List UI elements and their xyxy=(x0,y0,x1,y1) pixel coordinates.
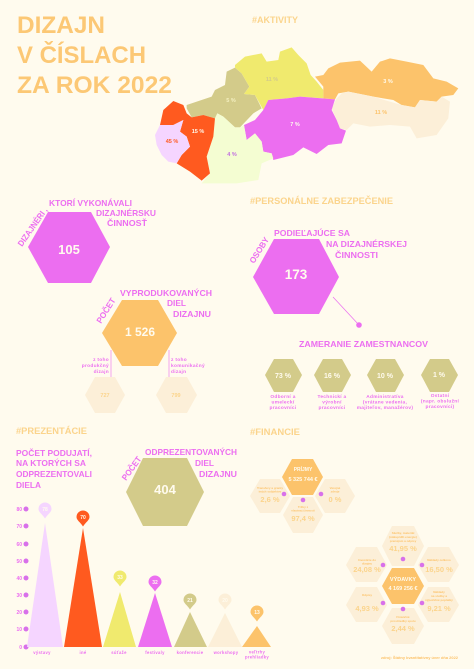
hexagon: 1 %: 1 % xyxy=(433,372,446,379)
hexagon: 24,08 % xyxy=(346,547,387,582)
hexagon: 4,93 %: Odpisy xyxy=(362,593,372,597)
label: osoby podieľajúce sa: ČINNOSTI xyxy=(335,249,378,260)
hexagon: 404: 404 xyxy=(154,482,177,497)
label: počet vyprodukovaných: DIZAJNU xyxy=(173,309,211,319)
hexagon: počet 1 526: 1 526 xyxy=(125,325,155,339)
label: osoby podieľajúce sa: PODIEĽAJÚCE SA xyxy=(274,227,350,238)
heading: zameranie zamestnancov: ZAMERANIE ZAMESTNANCOV xyxy=(299,339,428,349)
hexagon: 404 xyxy=(126,458,204,526)
label: z toho produkčný dizajn: produkčný xyxy=(82,363,109,369)
label: počet vyprodukovaných: POČET xyxy=(93,295,118,325)
label: ostatní: (napr. obslužní xyxy=(421,398,460,404)
bar: konferencie: 21 xyxy=(187,598,193,604)
region: orange xyxy=(315,58,458,107)
label: technickí a výrobní pracovníci: pracovníci xyxy=(318,405,346,411)
hexagon: dizajnéri 105: 105 xyxy=(58,242,80,257)
hexagon: 9,21 %: 9,21 % xyxy=(427,604,451,613)
label: počet odprezentovaných: DIEL xyxy=(195,458,214,468)
hexagon: dizajnéri 105 xyxy=(28,212,110,283)
bar: konferencie: konferencie xyxy=(177,650,204,655)
hexagon: tržby 97,4 %: 97,4 % xyxy=(291,514,315,523)
hexagon: tržby 97,4 %: vlastnej činnosti xyxy=(291,508,315,512)
hexagon: 9,21 %: Náklady xyxy=(433,590,445,594)
hexagon: 24,08 %: dizajnu xyxy=(362,562,372,566)
bar: výstavy: výstavy xyxy=(33,650,51,655)
label: počet odprezentovaných xyxy=(119,446,237,482)
region: olive xyxy=(187,68,262,127)
chart: y axis: 40 xyxy=(16,576,22,582)
chart: y axis: 70 xyxy=(16,524,22,530)
label: administratíva: Administratíva xyxy=(366,394,404,400)
label: z toho produkčný dizajn xyxy=(82,357,109,375)
hexagon: 727 xyxy=(85,377,125,413)
label: z toho komunikačný dizajn: z toho xyxy=(171,357,187,363)
bar: veľtrhy prehliadky xyxy=(242,606,271,660)
hexagon: služby 41,95 %: prenájom a odpisy xyxy=(390,539,417,543)
dots: výdavky xyxy=(381,557,424,611)
bar: veľtrhy prehliadky: veľtrhy xyxy=(249,650,266,654)
bar: festivaly: festivaly xyxy=(145,650,165,655)
label: technickí a výrobní pracovníci: Technickí a xyxy=(317,394,347,400)
map percentages: 15 % xyxy=(192,129,204,135)
hexagon: 16 %: 16 % xyxy=(324,373,341,380)
hexagon: 9,21 % xyxy=(418,587,459,622)
label: dizajnéri: ČINNOSŤ xyxy=(107,217,148,228)
bar: súťaže xyxy=(103,570,136,655)
connectors xyxy=(108,350,172,383)
label: počet odprezentovaných: DIZAJNU xyxy=(199,469,237,479)
bar: festivaly xyxy=(138,576,172,655)
hexagon: služby 41,95 % xyxy=(382,526,424,566)
label: odborní a umeleckí pracovníci: umeleckí xyxy=(272,400,295,406)
hexagon: 24,08 %: Investície do xyxy=(358,558,376,562)
chart: y axis: 80 xyxy=(16,507,22,513)
label: počet vyprodukovaných xyxy=(93,287,212,325)
hexagon: 24,08 %: 24,08 % xyxy=(353,565,381,574)
map percentages: 3 % xyxy=(383,79,393,85)
bar: workshopy: workshopy xyxy=(213,650,239,655)
hexagon: verejné zdroje 0 %: zdroje xyxy=(331,490,340,494)
region: pink xyxy=(244,97,346,160)
bar: veľtrhy prehliadky: 13 xyxy=(254,610,260,616)
bar: workshopy xyxy=(208,594,242,655)
label: technickí a výrobní pracovníci: výrobní xyxy=(322,400,342,406)
hexagon: 16 % xyxy=(314,359,351,392)
hexagon: osoby 173: 173 xyxy=(285,267,308,282)
label: ostatní: Ostatní xyxy=(431,393,450,399)
label: odborní a umeleckí pracovníci: Odborní a xyxy=(270,394,296,400)
label: administratíva: majiteľov, manažérov) xyxy=(357,405,413,411)
hexagon: 10 %: 10 % xyxy=(377,373,394,380)
hexagon: 2,44 %: Finančné xyxy=(396,615,410,619)
hexagon: 2,44 %: prostriedky spolu xyxy=(390,619,416,623)
map percentages: 45 % xyxy=(166,139,178,145)
hexagon: 727: 727 xyxy=(100,393,110,399)
chart: y axis: 30 xyxy=(16,593,22,599)
bar: iné xyxy=(64,511,102,655)
hexagon: 73 %: 73 % xyxy=(275,373,292,380)
label: odborní a umeleckí pracovníci xyxy=(270,394,296,411)
hexagon: 4,93 %: 4,93 % xyxy=(355,604,379,613)
label: počet vyprodukovaných: VYPRODUKOVANÝCH xyxy=(120,287,212,298)
region: yellow xyxy=(235,47,323,110)
map of Slovakia xyxy=(155,47,458,183)
hexagon: príjmy: PRÍJMY xyxy=(294,465,313,473)
label: technickí a výrobní pracovníci xyxy=(317,394,347,411)
hexagon: služby 41,95 %: 41,95 % xyxy=(389,544,417,553)
bar: iné: iné xyxy=(80,650,87,655)
hexagon: 16,50 %: 16,50 % xyxy=(425,565,453,574)
hexagon: 4,93 % xyxy=(346,587,387,622)
hexagon: počet 1 526 xyxy=(102,300,177,366)
hexagon: verejné zdroje 0 % xyxy=(315,479,355,513)
chart: y axis: 10 xyxy=(16,627,22,633)
map percentages: 5 % xyxy=(226,98,236,104)
label: z toho produkčný dizajn: dizajn xyxy=(94,369,109,375)
hexagon: 16,50 % xyxy=(418,547,459,582)
hexagon: výdavky xyxy=(382,568,424,604)
dots: príjmy xyxy=(282,492,323,502)
source note: zdroj: Štátny kvantitatívny úver dňa 2022 xyxy=(381,655,458,660)
hexagon: 16,50 %: Náklady celkovo xyxy=(427,558,451,562)
hexagon: tržby 97,4 % xyxy=(283,497,323,533)
bar: súťaže: súťaže xyxy=(111,650,127,655)
region: lime xyxy=(202,113,273,183)
text: počet podujatí: NA KTORÝCH SA xyxy=(16,457,86,468)
label: ostatní xyxy=(421,393,460,410)
chart: y axis: 50 xyxy=(16,559,22,565)
map percentages: 11 % xyxy=(266,77,278,83)
bar: veľtrhy prehliadky: prehliadky xyxy=(245,654,269,660)
hexagon: nenávratné zdroje 2,6 %: 2,6 % xyxy=(260,495,280,504)
label: dizajnéri: DIZAJNÉRSKU xyxy=(96,208,156,218)
hexagon: 2,44 %: 2,44 % xyxy=(391,624,415,633)
hexagon: príjmy xyxy=(282,459,323,495)
label: z toho komunikačný dizajn xyxy=(171,357,205,375)
title: DIZAJN xyxy=(17,12,105,39)
text: počet podujatí: POČET PODUJATÍ, xyxy=(16,447,92,458)
label: ostatní: pracovníci) xyxy=(426,404,455,410)
hexagon: príjmy: 5 325 744 € xyxy=(288,477,318,483)
region: lilac xyxy=(155,120,190,163)
hexagon: 799: 799 xyxy=(171,393,181,399)
hexagon: 799 xyxy=(156,377,197,413)
chart: y axis xyxy=(16,506,28,651)
map percentages: 11 % xyxy=(375,110,387,116)
heading: prezentácie: #PREZENTÁCIE xyxy=(16,426,87,436)
label: administratíva: (vrátane vedenia, xyxy=(363,400,408,406)
label: z toho komunikačný dizajn: komunikačný xyxy=(171,363,205,369)
label: počet vyprodukovaných: DIEL xyxy=(167,298,186,308)
map percentages: 7 % xyxy=(290,122,300,128)
text: počet podujatí xyxy=(16,447,92,490)
heading: personálne zabezpečenie: #PERSONÁLNE ZABEZPEČENIE xyxy=(250,195,393,206)
label: osoby podieľajúce sa: OSOBY xyxy=(247,235,271,265)
heading: aktivity: #AKTIVITY xyxy=(252,15,298,25)
chart: y axis: 0 xyxy=(19,645,22,651)
label: odborní a umeleckí pracovníci: pracovníci xyxy=(270,405,296,411)
hexagon: služby 41,95 %: Služby, materiál xyxy=(392,531,414,535)
bar: výstavy xyxy=(27,502,63,655)
title xyxy=(17,12,172,99)
hexagon: verejné zdroje 0 %: Verejné xyxy=(330,486,341,490)
map percentages: 4 % xyxy=(227,152,237,158)
hexagon: nenávratné zdroje 2,6 %: iných subjektov xyxy=(259,490,282,494)
hexagon: výdavky: 4 169 256 € xyxy=(388,586,418,592)
hexagon: 10 % xyxy=(367,359,404,392)
bar: súťaže: 33 xyxy=(117,575,123,581)
map percentages xyxy=(166,77,393,158)
label: z toho produkčný dizajn: z toho xyxy=(93,357,109,363)
title: V ČÍSLACH xyxy=(17,41,146,69)
chart: y axis: 60 xyxy=(16,542,22,548)
label: dizajnéri: DIZAJNÉRI , xyxy=(15,206,49,248)
label: administratíva xyxy=(357,394,413,411)
region: cream xyxy=(332,92,450,138)
bar: výstavy: 78 xyxy=(42,507,48,513)
hexagon: nenávratné zdroje 2,6 %: Transfery a granty xyxy=(257,486,283,490)
text: počet podujatí: ODPREZENTOVALI xyxy=(16,469,92,479)
hexagon: výdavky: VÝDAVKY xyxy=(390,576,416,583)
label: osoby podieľajúce sa xyxy=(247,227,407,265)
hexagon: 1 % xyxy=(421,359,458,392)
bar: iné: 70 xyxy=(80,515,86,521)
chart: y axis: 20 xyxy=(16,610,22,616)
hexagon: 73 % xyxy=(265,359,302,392)
label: dizajnéri xyxy=(15,198,156,248)
hexagon: 2,44 % xyxy=(382,608,424,644)
hexagon: verejné zdroje 0 %: 0 % xyxy=(329,495,342,504)
connector: osoby xyxy=(333,297,362,328)
bar: festivaly: 32 xyxy=(152,580,158,586)
title: ZA ROK 2022 xyxy=(17,72,172,99)
hexagon: nenávratné zdroje 2,6 % xyxy=(250,479,290,513)
hexagon: služby 41,95 %: (nákup/dlh energie) xyxy=(389,535,417,539)
label: z toho komunikačný dizajn: dizajn xyxy=(171,369,186,375)
hexagon: 9,21 %: výpožičné poplatky xyxy=(425,598,453,602)
bar: workshopy: 20 xyxy=(222,598,228,604)
heading: financie: #FINANCIE xyxy=(250,427,300,437)
hexagon: tržby 97,4 %: Tržby z xyxy=(298,505,309,509)
bar: konferencie xyxy=(174,594,207,655)
label: osoby podieľajúce sa: NA DIZAJNÉRSKEJ xyxy=(326,239,407,249)
label: počet odprezentovaných: ODPREZENTOVANÝCH xyxy=(145,446,237,457)
label: počet odprezentovaných: POČET xyxy=(119,453,144,482)
hexagon: osoby 173 xyxy=(253,239,339,314)
hexagon: 9,21 %: na služby a xyxy=(431,594,447,598)
label: dizajnéri: KTORÍ VYKONÁVALI xyxy=(49,198,132,208)
region: red xyxy=(160,101,215,181)
text: počet podujatí: DIELA xyxy=(16,480,41,490)
